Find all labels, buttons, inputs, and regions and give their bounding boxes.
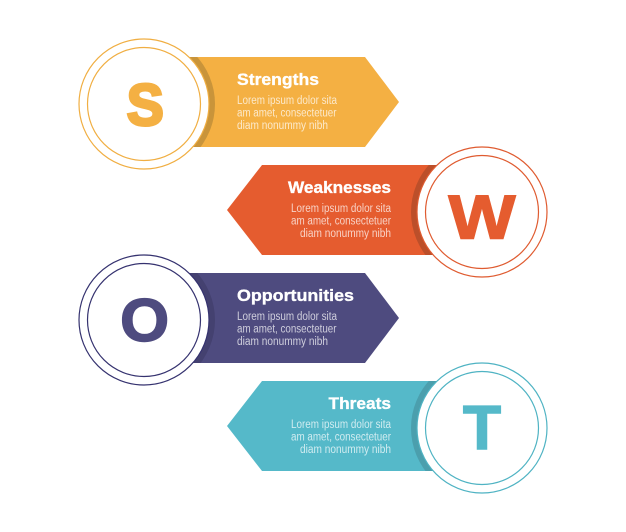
letter O: O <box>120 287 169 354</box>
arrow banner: strengths <box>144 57 399 147</box>
letter W: W <box>448 183 516 252</box>
text block: strengths: am amet, consectetuer <box>237 108 337 120</box>
banner shadow: strengths <box>190 57 215 147</box>
circle badge: threats <box>417 363 547 493</box>
text block: opportunities <box>237 311 338 348</box>
text block: strengths <box>237 95 338 132</box>
panel: threats <box>227 357 553 499</box>
circle badge: opportunities <box>79 255 209 385</box>
arrow banner: threats <box>227 381 482 471</box>
banner shadow: weaknesses <box>411 165 436 255</box>
text block: opportunities: diam nonummy nibh <box>237 336 328 348</box>
text block: opportunities: am amet, consectetuer <box>237 324 337 336</box>
circle badge: weaknesses <box>417 147 547 277</box>
heading: strengths: Strengths <box>237 70 319 89</box>
text block: strengths: Lorem ipsum dolor sita <box>237 95 338 107</box>
text block: threats: Lorem ipsum dolor sita <box>291 419 392 431</box>
arrow banner: opportunities <box>144 273 399 363</box>
heading: threats: Threats <box>328 394 391 413</box>
text block: weaknesses: diam nonummy nibh <box>300 228 391 240</box>
banner shadow: threats <box>411 381 436 471</box>
text block: opportunities: Lorem ipsum dolor sita <box>237 311 338 323</box>
heading: weaknesses: Weaknesses <box>288 178 391 197</box>
panel: weaknesses <box>227 141 553 283</box>
letter S: S <box>127 73 164 138</box>
text block: weaknesses <box>291 203 392 240</box>
text block: weaknesses: am amet, consectetuer <box>291 216 391 228</box>
text block: threats <box>291 419 392 456</box>
text block: strengths: diam nonummy nibh <box>237 120 328 132</box>
banner shadow: opportunities <box>190 273 215 363</box>
arrow banner: weaknesses <box>227 165 482 255</box>
circle badge: strengths <box>79 39 209 169</box>
text block: threats: am amet, consectetuer <box>291 432 391 444</box>
text block: threats: diam nonummy nibh <box>300 444 391 456</box>
panel: opportunities <box>73 249 399 391</box>
SWOT infographic <box>78 38 548 494</box>
letter T: T <box>463 394 501 463</box>
text block: weaknesses: Lorem ipsum dolor sita <box>291 203 392 215</box>
heading: opportunities: Opportunities <box>237 286 354 305</box>
panel: strengths <box>73 33 399 175</box>
